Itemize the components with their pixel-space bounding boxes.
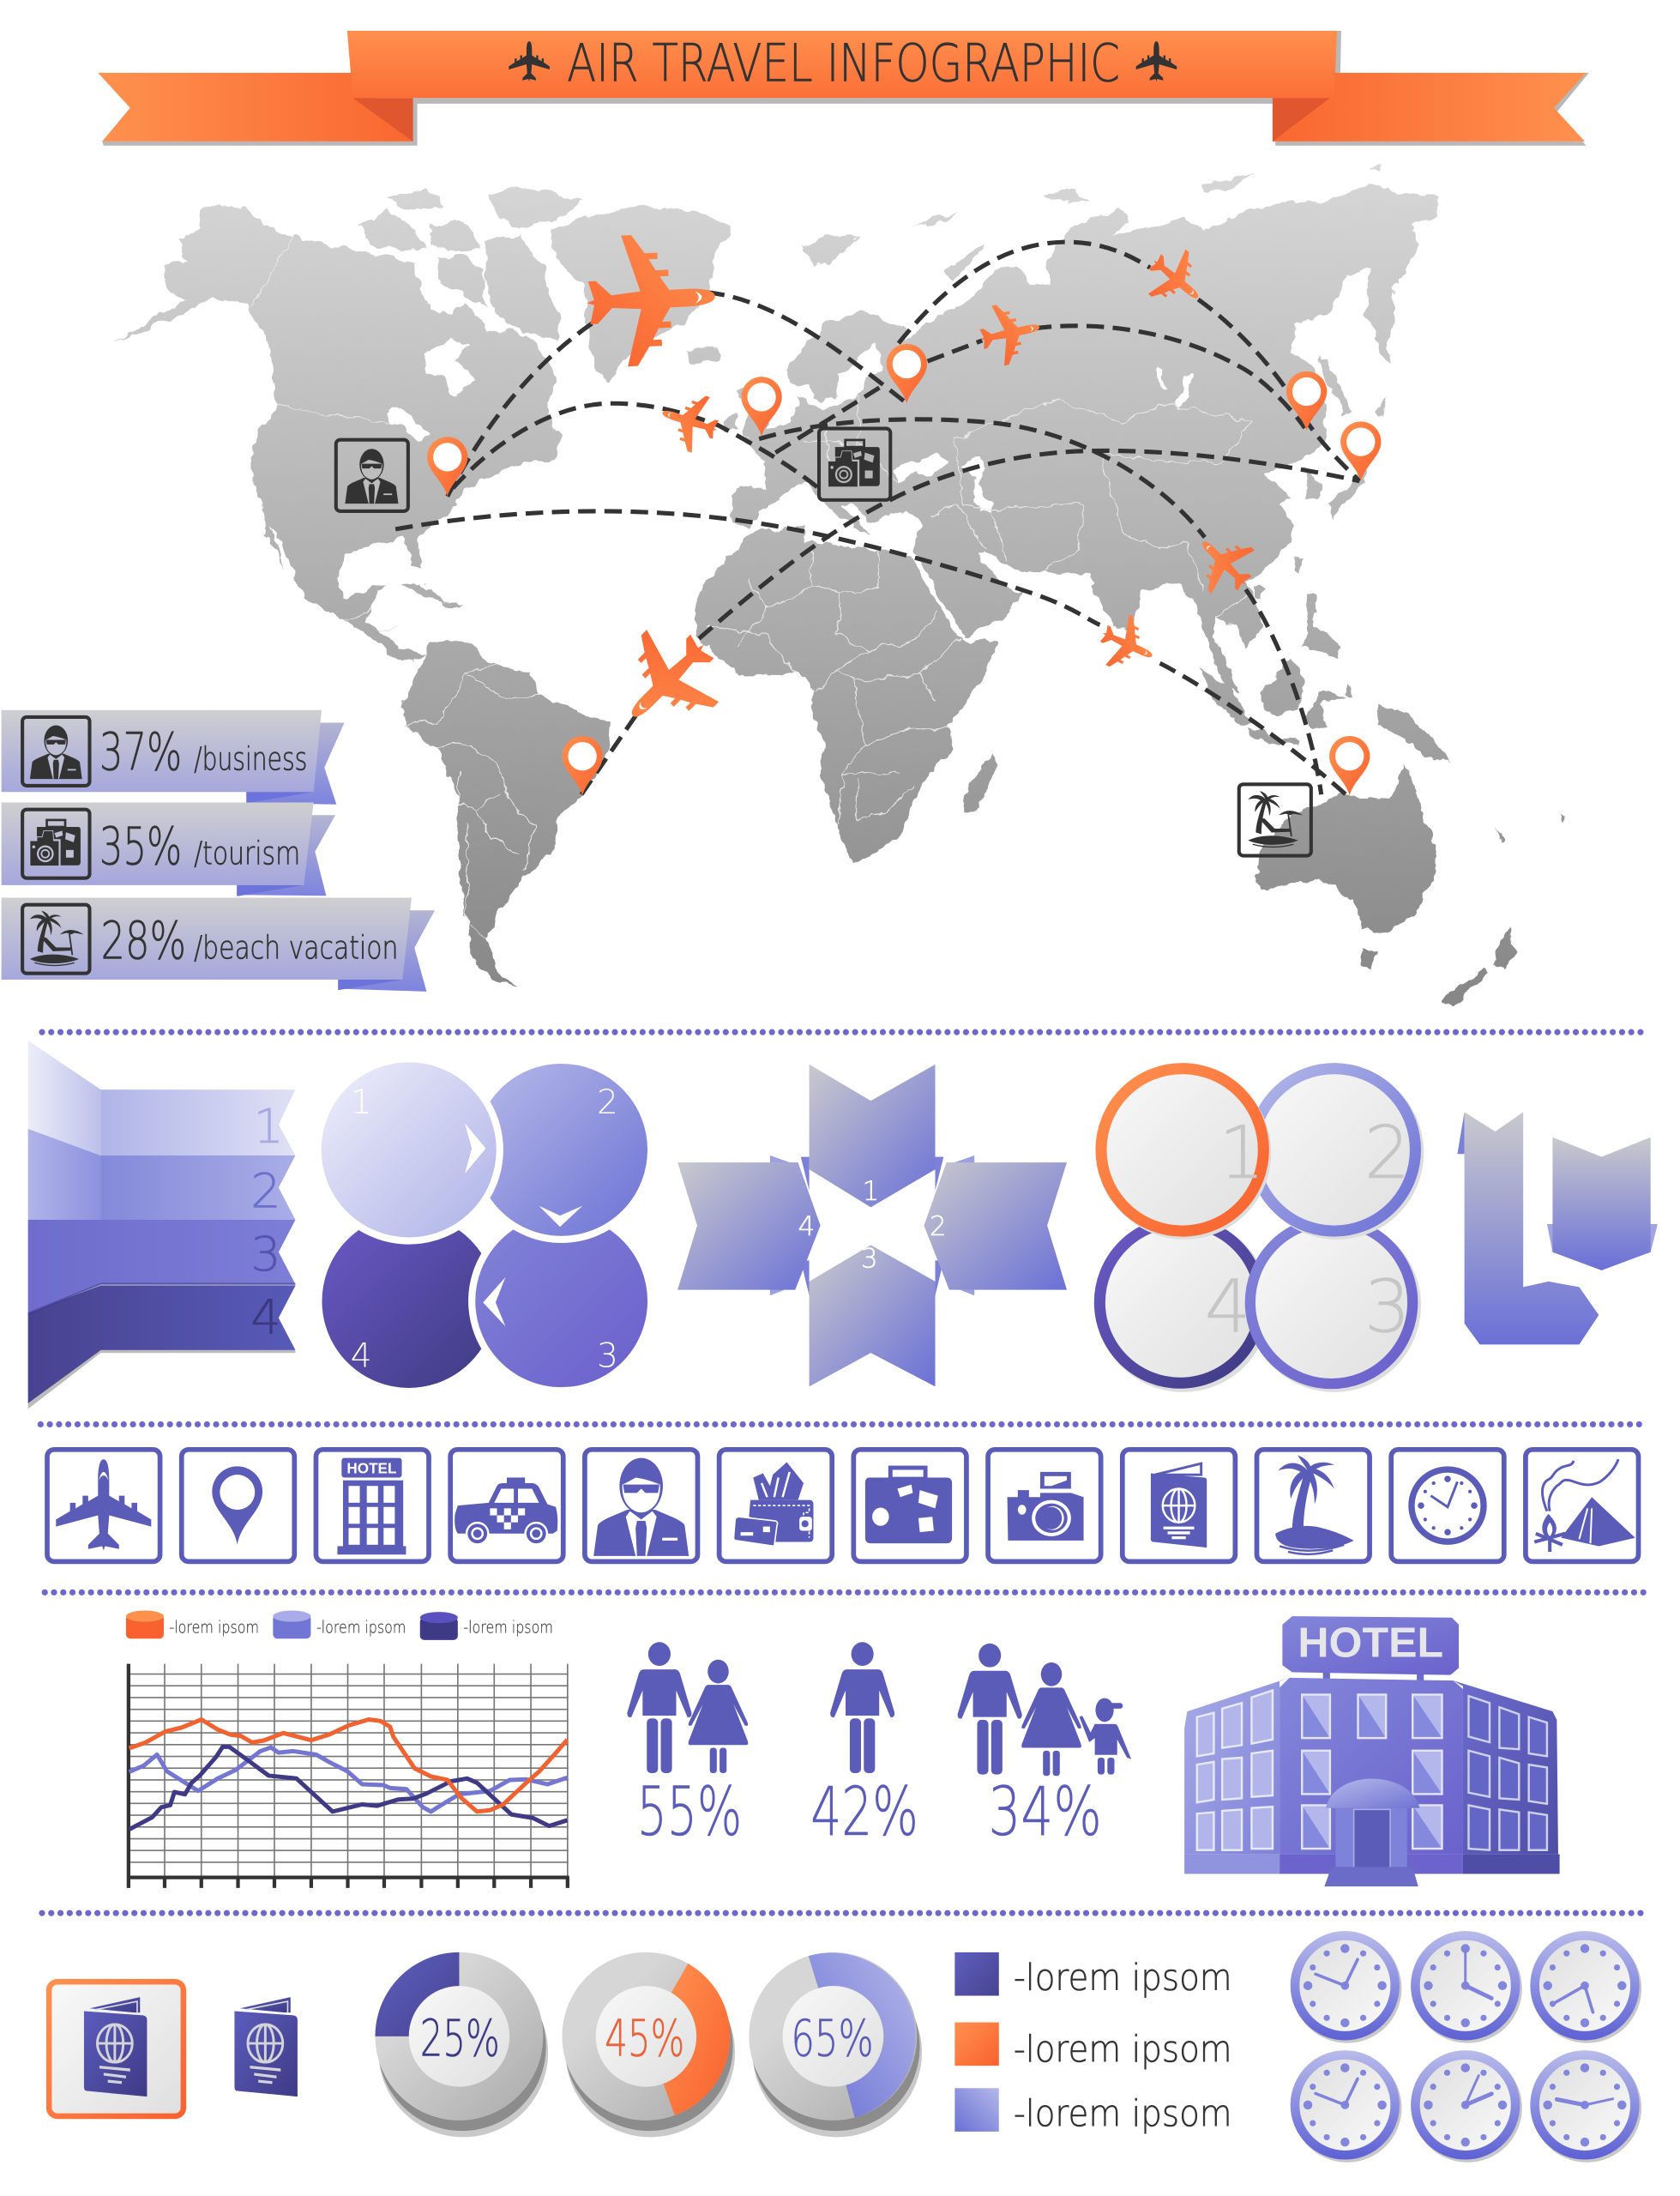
diagram: stacked arrows: 2 <box>250 1163 281 1219</box>
diagram: stacked arrows: 4 <box>250 1289 281 1345</box>
legend item: light purple: -lorem ipsom <box>316 1618 406 1638</box>
legend item: light purple <box>273 1611 406 1638</box>
diagram: four numbered rings: 2 <box>1364 1111 1411 1196</box>
diagram: four arrows cross: 3 <box>861 1244 878 1275</box>
diagram: four circles with chevrons: 2 <box>597 1083 618 1122</box>
icon: tent and campfire <box>1534 1459 1635 1552</box>
diagram: four arrows cross: 4 <box>798 1211 815 1242</box>
ribbon: tourism: 35% <box>99 817 182 877</box>
donut chart 25% <box>376 1952 548 2137</box>
diagram: four circles with chevrons <box>318 1059 651 1391</box>
legend: donut charts <box>954 1952 1232 2135</box>
ribbon: business: /business <box>194 739 307 777</box>
clock 6 <box>1530 2050 1641 2163</box>
clocks <box>1291 1931 1641 2163</box>
diagram: four numbered rings: 3 <box>1364 1265 1411 1350</box>
stat: family 34% <box>958 1644 1131 1851</box>
ribbon: beach vacation: /beach vacation <box>194 929 398 967</box>
icon: beach on map <box>1239 784 1311 856</box>
icon: camera <box>1008 1472 1084 1541</box>
legend item: orange <box>126 1611 259 1638</box>
location pins <box>427 344 1381 795</box>
diagram: stacked arrows: 3 <box>250 1227 281 1282</box>
icon: map pin <box>212 1466 262 1545</box>
stat: couple 55% <box>627 1642 748 1851</box>
flight routes <box>395 242 1359 794</box>
icon: wallet <box>733 1462 813 1546</box>
clock 4 <box>1291 2050 1401 2163</box>
icon: hotel <box>337 1458 406 1554</box>
diagram: four numbered rings: 1 <box>1219 1111 1265 1196</box>
people statistics <box>627 1642 1131 1851</box>
legend item: orange: -lorem ipsom <box>170 1618 259 1638</box>
diagram: four arrows cross: 1 <box>863 1176 879 1207</box>
icon: suitcase <box>865 1468 952 1543</box>
hotel building <box>1184 1616 1560 1886</box>
icon: businessman <box>593 1458 689 1556</box>
donut chart 45% <box>562 1952 735 2137</box>
diagram: four arrows cross <box>677 1065 1067 1386</box>
stat: single 42%: 42% <box>810 1773 918 1851</box>
world map <box>114 166 1565 1005</box>
icon: title plane left <box>509 41 550 81</box>
icon: taxi <box>455 1477 557 1546</box>
hotel building: HOTEL <box>1298 1620 1443 1666</box>
donut chart 45%: 45% <box>605 2009 684 2068</box>
diagram: folded arrows <box>1457 1112 1658 1344</box>
icon: passport <box>234 1997 298 2096</box>
icon: business traveller on map <box>336 440 408 511</box>
diagram: four circles with chevrons: 3 <box>597 1336 618 1375</box>
title text: AIR TRAVEL INFOGRAPHIC <box>567 34 1120 94</box>
diagram: four circles with chevrons: 1 <box>351 1083 372 1122</box>
icon row <box>47 1450 1639 1561</box>
line chart <box>128 1664 569 1888</box>
stat: family 34%: 34% <box>989 1773 1102 1851</box>
diagram: four numbered rings <box>1096 1065 1424 1392</box>
legend: line chart <box>126 1611 553 1640</box>
clock 2 <box>1411 1931 1522 2043</box>
icon: title plane right <box>1136 41 1177 81</box>
donut chart 65% <box>749 1952 922 2137</box>
passport card <box>49 1982 184 2116</box>
icon: palm tree <box>1275 1455 1354 1554</box>
title ribbon <box>98 31 1589 146</box>
legend: donut charts: -lorem ipsom <box>1014 1958 1232 2000</box>
diagram: four circles with chevrons: 4 <box>351 1336 372 1375</box>
ribbon: tourism <box>2 803 335 896</box>
ribbon: business: 37% <box>99 722 182 782</box>
ribbon: business <box>2 710 345 805</box>
panel: trip purpose ribbons <box>2 710 435 992</box>
clock 5 <box>1411 2050 1522 2163</box>
icon: hotel: HOTEL <box>346 1460 396 1477</box>
donut chart 25%: 25% <box>420 2009 500 2068</box>
diagram: stacked arrows: 1 <box>253 1099 284 1155</box>
icon: luggage on map <box>819 429 890 500</box>
ribbon: beach vacation <box>2 898 435 992</box>
icon: airplane <box>56 1459 151 1550</box>
icon: clock <box>1408 1466 1487 1545</box>
legend: donut charts: -lorem ipsom <box>1014 2093 1232 2135</box>
ribbon: beach vacation: 28% <box>101 912 186 972</box>
diagram: four arrows cross: 2 <box>930 1211 947 1242</box>
donut chart 65%: 65% <box>791 2009 874 2068</box>
stat: couple 55%: 55% <box>637 1773 742 1851</box>
clock 1 <box>1291 1931 1401 2043</box>
legend item: dark purple: -lorem ipsom <box>463 1618 553 1638</box>
stat: single 42% <box>810 1642 918 1851</box>
ribbon: tourism: /tourism <box>194 834 300 872</box>
clock 3 <box>1530 1931 1641 2043</box>
diagram: four numbered rings: 4 <box>1205 1265 1251 1350</box>
planes on map <box>583 231 1267 751</box>
icon: passport <box>1151 1463 1207 1547</box>
legend item: dark purple <box>420 1612 553 1640</box>
diagram: stacked arrows <box>28 1041 295 1409</box>
legend: donut charts: -lorem ipsom <box>1014 2029 1232 2071</box>
